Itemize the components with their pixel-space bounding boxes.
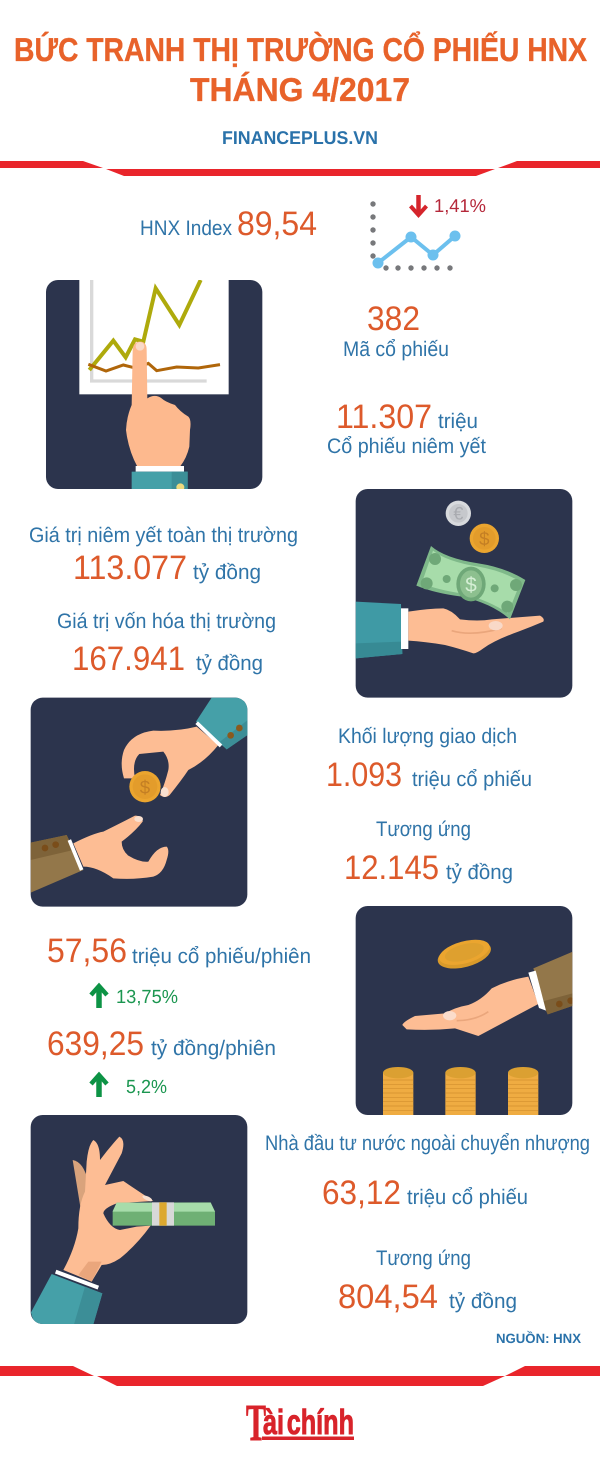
icon: index line chart [370, 201, 460, 271]
title: THÁNG 4/2017 [190, 71, 410, 108]
panel: hand with banknote and coins: € [453, 504, 463, 524]
stat: listed tickers: Mã cổ phiếu [343, 338, 449, 361]
stat: trading value [344, 818, 513, 887]
title [14, 31, 587, 108]
stat: listed market value: Giá trị niêm yết toàn thị trường [29, 524, 298, 547]
stat: HNX Index: HNX Index [140, 217, 232, 240]
stat: value per session: tỷ đồng/phiên [151, 1037, 276, 1060]
panel: hand with banknote and coins: $ [479, 528, 490, 549]
stat: listed shares: 11.307 [336, 398, 432, 436]
source note: NGUỒN: HNX [496, 1330, 581, 1346]
stat: listed market value: tỷ đồng [193, 561, 261, 584]
stat: listed shares [327, 398, 486, 458]
change: 1,41%: 1,41% [434, 195, 486, 216]
stat: market capitalisation [57, 610, 276, 678]
stat: foreign investors transfer value [338, 1247, 517, 1316]
top red band [0, 161, 600, 176]
stat: trading volume: Khối lượng giao dịch [338, 725, 517, 748]
stat: listed market value: 113.077 [73, 549, 187, 587]
stat: foreign investors transfer volume: triệu cổ phiếu [407, 1186, 528, 1209]
icon: red down arrow [410, 195, 426, 215]
panel: hand with banknote and coins [356, 489, 572, 698]
stat: market capitalisation: Giá trị vốn hóa thị trường [57, 610, 276, 633]
change: 5,2%: 5,2% [126, 1077, 167, 1098]
stat: trading value: Tương ứng [376, 818, 471, 841]
bottom red band [0, 1366, 600, 1386]
stat: HNX Index [140, 205, 317, 243]
stat: value per session: 639,25 [47, 1025, 144, 1063]
stat: foreign investors transfer volume: 63,12 [322, 1174, 401, 1212]
change: 13,75%: 13,75% [116, 987, 178, 1008]
logo: Tài chính: ài chính [263, 1403, 354, 1442]
stat: volume per session: 57,56 [47, 932, 127, 970]
stat: trading volume: 1.093 [326, 756, 402, 794]
icon: green up arrow [91, 1075, 107, 1097]
stat: value per session [47, 1025, 276, 1063]
stat: volume per session: triệu cổ phiếu/phiên [132, 945, 311, 968]
stat: HNX Index: 89,54 [237, 205, 317, 243]
stat: listed market value [29, 524, 298, 587]
stat: trading value: 12.145 [344, 849, 439, 887]
icon: green up arrow [91, 986, 107, 1008]
stat: listed shares: Cổ phiếu niêm yết [327, 435, 486, 458]
logo: Tài chính [246, 1395, 354, 1452]
stat: trading value: tỷ đồng [446, 861, 513, 884]
stat: foreign investors transfer value: 804,54 [338, 1278, 438, 1316]
panel: two hands passing a coin [31, 698, 250, 907]
panel: two hands passing a coin: $ [140, 777, 150, 798]
stat: market capitalisation: tỷ đồng [196, 652, 263, 675]
stat: foreign investors transfer value: Tương ứng [376, 1247, 471, 1270]
panel: hand holding banknote bundle [31, 1115, 247, 1327]
stat: foreign investors transfer value: tỷ đồng [449, 1290, 517, 1313]
panel: hand with banknote and coins: $ [465, 573, 477, 596]
stat: listed tickers: 382 [367, 300, 420, 338]
stat: trading volume [326, 725, 532, 794]
panel: hand with falling coin and coin stacks [356, 906, 575, 1116]
logo: Tài chính: T [246, 1395, 266, 1452]
stat: listed shares: triệu [438, 410, 478, 433]
website label: FINANCEPLUS.VN [222, 127, 378, 148]
panel: chart with pointing hand [46, 280, 262, 492]
stat: trading volume: triệu cổ phiếu [412, 768, 532, 791]
stat: volume per session [47, 932, 311, 970]
stat: market capitalisation: 167.941 [72, 640, 185, 678]
stat: foreign investors transfer volume [265, 1132, 590, 1212]
stat: listed tickers [343, 300, 449, 361]
